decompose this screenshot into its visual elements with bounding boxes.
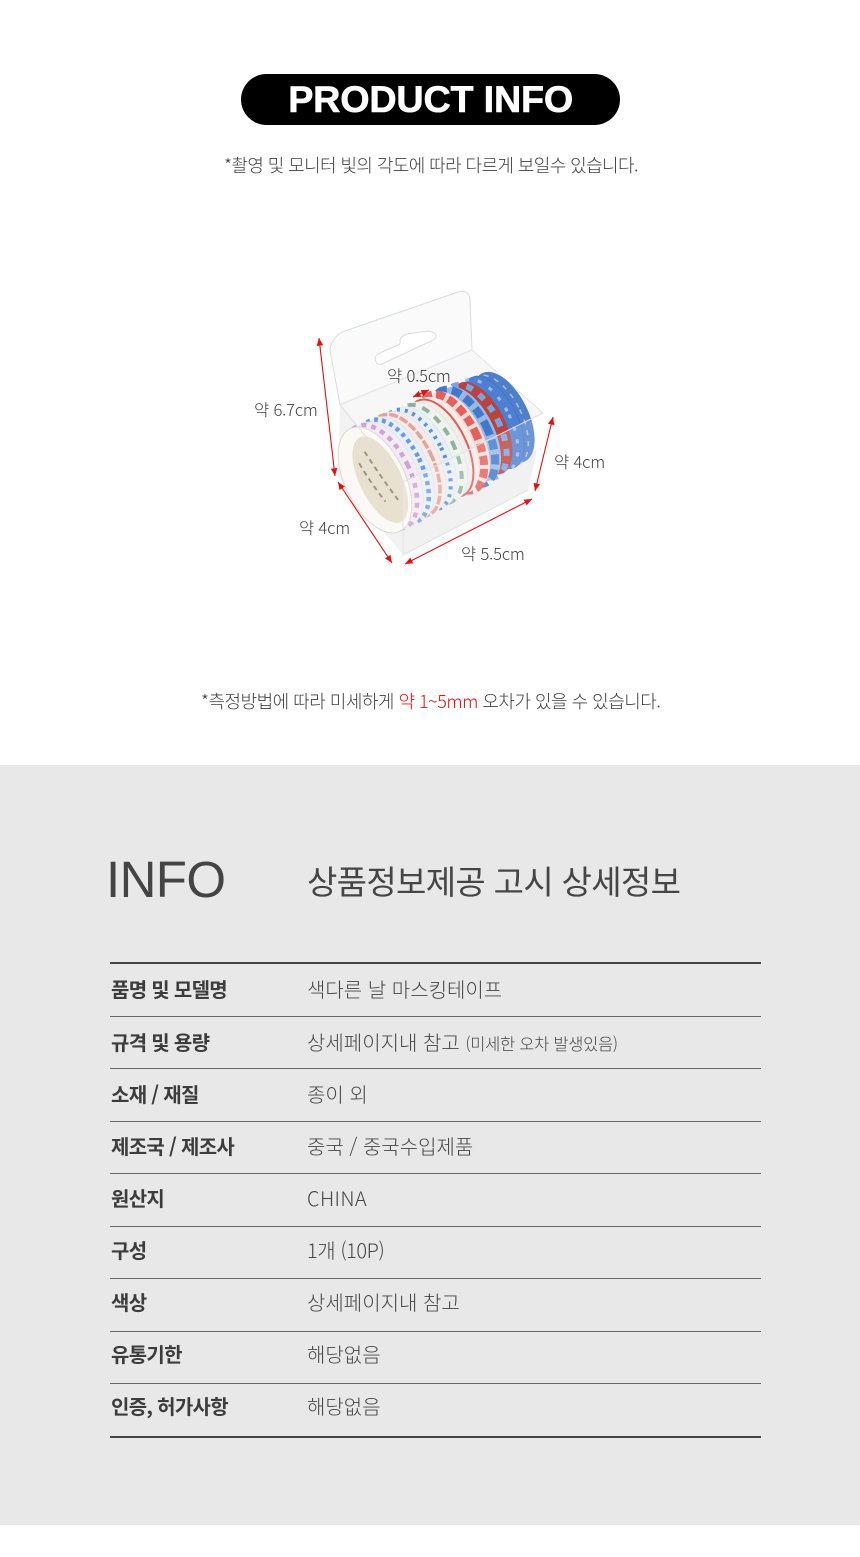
section title: 상품정보제공 고시 상세정보 <box>307 856 680 904</box>
table: product details: 해당없음 <box>307 1339 381 1368</box>
front box sheen <box>403 413 543 555</box>
INFO heading: INFO <box>106 851 225 908</box>
product diagram <box>316 290 554 564</box>
table: product details: 제조국 / 제조사 <box>111 1131 234 1160</box>
table: product details: 소재 / 재질 <box>111 1079 199 1108</box>
dimension label: 5.5cm: 약 5.5cm <box>461 541 525 565</box>
table: product details: 해당없음 <box>307 1391 381 1420</box>
table: product details: 유통기한 <box>111 1339 182 1368</box>
table: product details: 상세페이지내 참고 <box>307 1287 460 1316</box>
table: product details: 종이 외 <box>307 1079 368 1108</box>
note: photo disclaimer: *촬영 및 모니터 빛의 각도에 따라 다르게 보일수 있습니다. <box>224 152 638 178</box>
table: product details: 1개 (10P) <box>307 1235 384 1264</box>
panel: info section <box>0 765 860 1525</box>
table: product details: 인증, 허가사항 <box>111 1391 228 1420</box>
dimension label: 4cm right: 약 4cm <box>554 449 605 473</box>
dimension arrows <box>319 338 553 564</box>
heading pill: PRODUCT INFO <box>241 74 620 125</box>
table: product details: 규격 및 용량 <box>111 1027 209 1056</box>
table: product details: 색상 <box>111 1287 146 1316</box>
table: product details: 색다른 날 마스킹테이프 <box>307 974 502 1003</box>
table: product details: 상세페이지내 참고 (미세한 오차 발생있음) <box>307 1027 618 1056</box>
table: product details: 구성 <box>111 1235 146 1264</box>
table: product details: 원산지 <box>111 1183 164 1212</box>
washi tape rolls <box>323 355 551 544</box>
table: product details: 품명 및 모델명 <box>111 974 227 1003</box>
box edge highlights <box>340 405 543 555</box>
dimension label: 6.7cm: 약 6.7cm <box>254 397 318 421</box>
table: product details: 중국 / 중국수입제품 <box>307 1131 473 1160</box>
heading pill: PRODUCT INFO: PRODUCT INFO <box>288 79 573 120</box>
dimension label: 0.5cm: 약 0.5cm <box>387 363 451 387</box>
packaging back with hang tab <box>330 291 543 555</box>
table: product details: CHINA <box>307 1183 367 1212</box>
dimension label: 4cm left: 약 4cm <box>299 515 350 539</box>
note: measurement tolerance: *측정방법에 따라 미세하게 약 1~5mm 오차가 있을 수 있습니다. <box>201 688 660 714</box>
